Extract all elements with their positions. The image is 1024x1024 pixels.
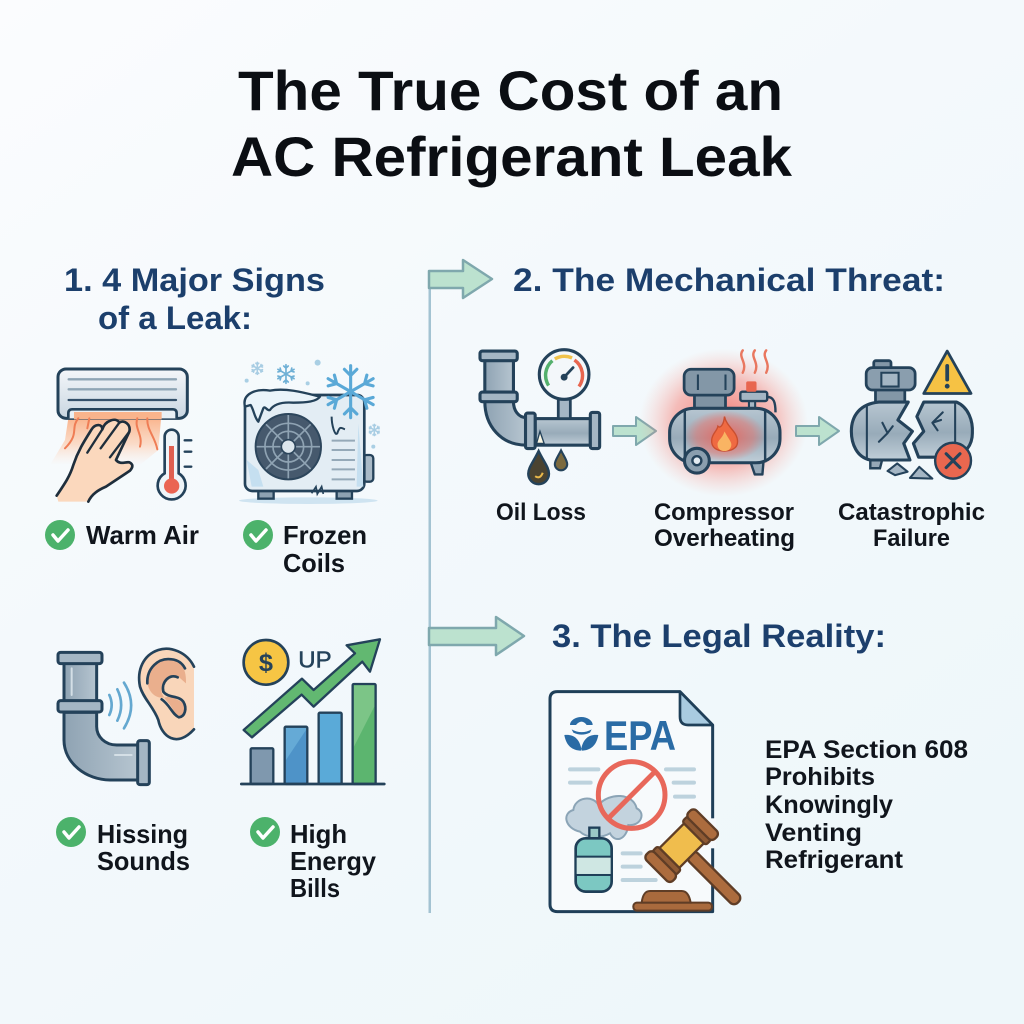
label: frozen coils: [243, 520, 367, 578]
icon: hissing pipe and ear: [58, 649, 194, 785]
label: frozen coils: Coils: [283, 548, 345, 578]
label: catastrophic failure: Failure: [873, 525, 950, 552]
heading: section 1: 1. 4 Major Signs: [64, 262, 325, 298]
icon: EPA document with prohibition, refrigerant tank and gavel: EPA: [604, 713, 676, 759]
arrow: overheating to failure: [796, 417, 839, 445]
heading: section 1: of a Leak:: [98, 300, 252, 336]
label: frozen coils: Frozen: [283, 520, 367, 550]
label: high energy bills: Energy: [290, 846, 377, 876]
label: compressor overheating: Overheating: [654, 525, 795, 552]
label: hissing sounds: [56, 817, 190, 876]
heading: section 3: 3. The Legal Reality:: [552, 618, 886, 654]
text: EPA section 608 statement: EPA Section 608: [765, 736, 968, 764]
text: EPA section 608 statement: [765, 736, 968, 874]
label: high energy bills: Bills: [290, 873, 340, 903]
arrow to mechanical threat: [429, 260, 492, 298]
label: high energy bills: [250, 817, 377, 903]
heading: section 2: 2. The Mechanical Threat:: [513, 262, 945, 298]
heading: section 1: [64, 262, 325, 336]
EPA logo mark: [564, 717, 598, 751]
arrow to legal reality: [429, 617, 524, 655]
panel: signs of a leak: [45, 262, 384, 903]
icon: leaking pipe with pressure gauge: [480, 350, 600, 484]
text: EPA section 608 statement: Prohibits: [765, 763, 875, 791]
icon: broken compressor with warning: [851, 351, 972, 479]
icon: EPA document with prohibition, refrigerant tank and gavel: [550, 692, 763, 927]
icon: energy bill bars with rising arrow: [241, 639, 384, 784]
label: compressor overheating: Compressor: [654, 499, 794, 526]
title: The True Cost of an: [238, 59, 783, 122]
text: EPA section 608 statement: Venting: [765, 819, 862, 847]
icon: frozen outdoor coil unit with snowflakes: [239, 360, 380, 504]
label: compressor overheating: [654, 499, 795, 552]
arrow: oil loss to overheating: [613, 417, 656, 445]
icon: overheating compressor: [639, 349, 808, 497]
label: catastrophic failure: Catastrophic: [838, 499, 985, 526]
label: high energy bills: High: [290, 819, 347, 849]
title: AC Refrigerant Leak: [231, 125, 793, 188]
icon: energy bill bars with rising arrow: UP: [298, 647, 332, 673]
divider with branch arrows: [428, 260, 524, 913]
panel: mechanical threat: [480, 262, 985, 552]
panel: legal reality: [550, 618, 968, 927]
title: [231, 59, 793, 188]
text: EPA section 608 statement: Knowingly: [765, 791, 893, 819]
icon: energy bill bars with rising arrow: $: [259, 649, 273, 677]
label: oil loss: Oil Loss: [496, 499, 586, 526]
label: hissing sounds: Hissing: [97, 819, 188, 849]
label: warm air: Warm Air: [86, 520, 199, 550]
text: EPA section 608 statement: Refrigerant: [765, 846, 904, 874]
label: hissing sounds: Sounds: [97, 846, 190, 876]
icon: AC unit blowing warm air onto hand with thermometer: [50, 369, 191, 502]
label: catastrophic failure: [838, 499, 985, 552]
